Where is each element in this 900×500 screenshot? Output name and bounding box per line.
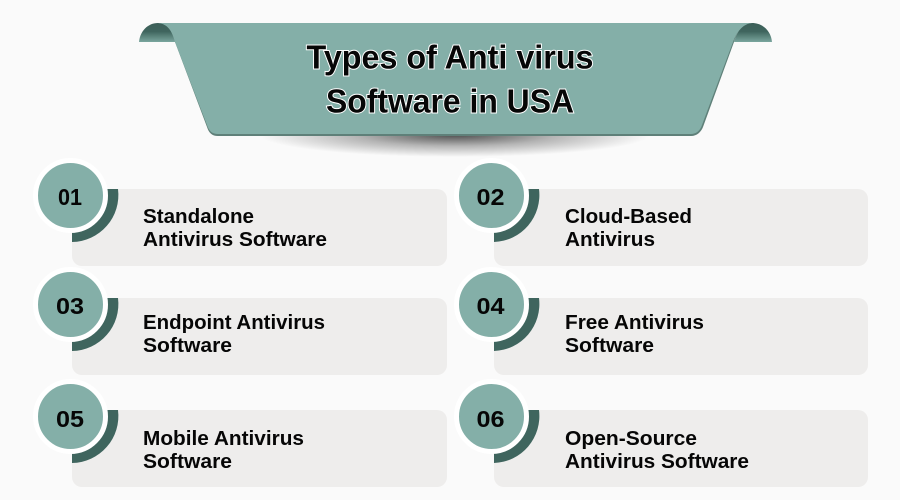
title: Types of Anti virus [306,40,594,76]
card [494,189,868,266]
left fold [139,23,175,42]
label [143,428,304,473]
label [143,206,327,251]
number: 01 [58,184,82,210]
number: 06 [476,406,504,432]
arc [71,189,118,242]
number: 03 [56,293,84,319]
arc [493,189,539,242]
item 02 [456,160,868,266]
banner shadow [260,113,650,157]
label [565,428,749,473]
arc [71,298,118,351]
badge [36,382,106,452]
badge [456,160,526,230]
card [72,410,447,487]
item 01 [36,160,447,266]
label: Antivirus Software [143,229,327,251]
label: Open-Source [565,428,697,450]
label: Antivirus [565,229,655,251]
badge [36,270,106,340]
label: Free Antivirus [565,312,704,334]
label: Cloud-Based [565,206,692,228]
label [565,206,692,251]
label: Antivirus Software [565,451,749,473]
arc [71,410,118,463]
banner [139,23,772,157]
number: 02 [476,184,504,210]
ribbon body [158,23,752,136]
item 05 [36,382,447,487]
item 03 [36,270,447,375]
label: Software [565,335,654,357]
arc [493,298,539,351]
card [494,410,868,487]
badge [456,382,526,452]
number: 05 [56,406,84,432]
badge [456,270,526,340]
card [72,298,447,375]
title: Software in USA [326,84,574,120]
label [143,312,325,357]
label: Software [143,451,232,473]
title [306,40,594,120]
item 06 [456,382,868,487]
number: 04 [476,293,505,319]
card [72,189,447,266]
arc [493,410,539,463]
label: Software [143,335,232,357]
right fold [734,23,772,42]
card [494,298,868,375]
label: Endpoint Antivirus [143,312,325,334]
badge [36,160,106,230]
item 04 [456,270,868,375]
label [565,312,704,357]
label: Standalone [143,206,254,228]
label: Mobile Antivirus [143,428,304,450]
